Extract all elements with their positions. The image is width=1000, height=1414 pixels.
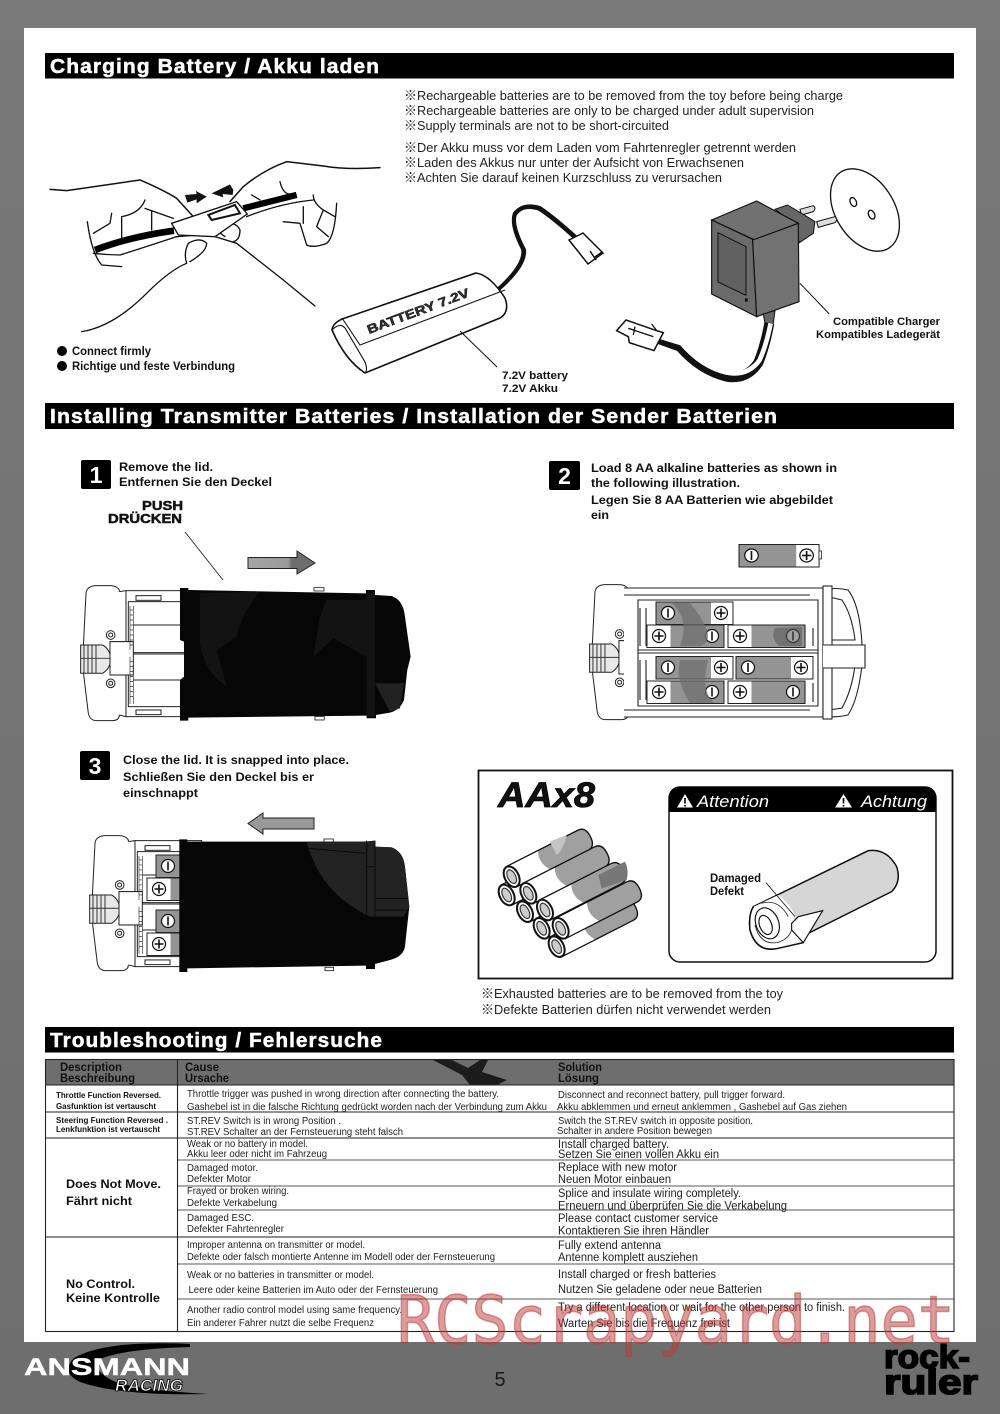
heading: troubleshooting: Troubleshooting / Fehlersuche	[50, 1030, 383, 1052]
push label: DRÜCKEN	[108, 511, 182, 526]
table header: Ursache	[185, 1071, 229, 1085]
column: solution: Nutzen Sie geladene oder neue Batterien	[558, 1284, 762, 1296]
illustration: hands connecting plug	[50, 162, 380, 332]
column: description: Steering Function Reversed .	[56, 1116, 168, 1125]
heading: installing transmitter batteries: Installing Transmitter Batteries / Installation der Sender Batterien	[50, 406, 778, 428]
text block: charging safety notes: ※	[404, 88, 417, 103]
column: solution: Splice and insulate wiring completely.	[558, 1188, 741, 1200]
text block: charging safety notes: Rechargeable batteries are only to be charged under adult supervision	[417, 103, 814, 118]
column: cause: Ein anderer Fahrer nutzt die selbe Frequenz	[187, 1318, 374, 1329]
illustration: eight AA batteries	[495, 826, 644, 960]
step 2 instructions: ein	[591, 508, 609, 522]
warning icon left	[677, 794, 693, 808]
column: solution: Schalter in andere Position bewegen	[557, 1126, 712, 1137]
column: solution	[557, 1090, 847, 1330]
page number: 5	[494, 1369, 506, 1391]
heading: installing transmitter batteries	[45, 403, 954, 429]
text block: connect firmly	[57, 344, 235, 373]
step 1 instructions: Remove the lid.	[119, 460, 213, 474]
panel: AA x8 and attention box	[478, 770, 952, 978]
column: cause: Damaged ESC.	[187, 1213, 254, 1224]
section: installing transmitter batteries	[45, 403, 954, 1017]
troubleshooting table	[45, 1059, 954, 1332]
column: cause: Defekte Verkabelung	[187, 1198, 277, 1209]
text block: charging safety notes: Supply terminals are not to be short-circuited	[417, 118, 669, 133]
table header: Cause	[185, 1060, 219, 1074]
column: solution: Disconnect and reconnect battery, pull trigger forward.	[558, 1090, 785, 1101]
column: description: Does Not Move.	[66, 1177, 161, 1191]
column: solution: Kontaktieren Sie ihren Händler	[558, 1226, 709, 1238]
text block: charging safety notes: ※	[404, 155, 417, 170]
text block: charging safety notes: Laden des Akkus nur unter der Aufsicht von Erwachsenen	[417, 155, 744, 170]
step 2 badge: 2	[558, 463, 571, 489]
column: solution: Install charged battery.	[558, 1139, 669, 1151]
push label	[108, 498, 223, 580]
attention text: Attention	[696, 792, 769, 811]
column: cause: Throttle trigger was pushed in wrong direction after connecting the battery.	[187, 1089, 499, 1100]
text block: exhausted batteries note: Defekte Batterien dürfen nicht verwendet werden	[494, 1002, 771, 1017]
column: cause: Gashebel ist in die falsche Richtung gedrückt worden nach der Verbindung zum Akku	[187, 1102, 547, 1113]
table header: Lösung	[558, 1071, 599, 1085]
step 3 instructions	[123, 753, 349, 800]
column: solution: Replace with new motor	[558, 1162, 677, 1174]
column: cause: ST.REV Switch is in wrong Position .	[187, 1116, 341, 1127]
column: cause: Defekter Fahrtenregler	[187, 1224, 285, 1235]
arrow: slide lid right	[248, 551, 315, 574]
column: solution: Antenne komplett ausziehen	[558, 1252, 698, 1264]
table header: Description	[60, 1060, 122, 1074]
illustration: transmitter with lid on	[81, 586, 411, 721]
column: solution: Warten Sie bis die Frequenz frei ist	[558, 1318, 731, 1330]
step 3 badge: 3	[89, 753, 101, 779]
table header: Solution	[558, 1060, 602, 1074]
column: cause: Damaged motor.	[187, 1163, 258, 1174]
label: battery: 7.2V battery	[502, 370, 569, 382]
illustration: compatible charger	[617, 156, 914, 377]
column: description: Lenkfunktion ist vertauscht	[56, 1125, 160, 1134]
attention header bar	[669, 787, 936, 812]
step 3 instructions: einschnappt	[123, 786, 198, 800]
illustration: 7.2V battery pack	[332, 203, 603, 373]
label: battery: 7.2V Akku	[502, 383, 558, 395]
text block: charging safety notes: Achten Sie darauf keinen Kurzschluss zu verursachen	[417, 170, 722, 185]
table header: Beschreibung	[60, 1071, 135, 1085]
text block: exhausted batteries note: ※	[481, 1002, 494, 1017]
label: battery	[502, 370, 569, 395]
push label: PUSH	[142, 498, 183, 513]
column: cause: Leere oder keine Batterien im Auto oder der Fernsteuerung	[188, 1285, 438, 1296]
footer logo: rock ruler: ruler	[884, 1363, 978, 1402]
step 3 instructions: Schließen Sie den Deckel bis er	[123, 770, 314, 784]
column: solution: Neuen Motor einbauen	[558, 1174, 671, 1186]
step 2 instructions	[591, 461, 837, 522]
column: solution: Install charged or fresh batteries	[558, 1269, 716, 1281]
column: cause: ST.REV Schalter an der Fernsteuerung steht falsch	[187, 1127, 403, 1138]
column: description: Keine Kontrolle	[66, 1291, 160, 1305]
label: compatible charger	[816, 316, 941, 341]
step 2 instructions: Legen Sie 8 AA Batterien wie abgebildet	[591, 493, 833, 507]
icon: loose AA battery	[739, 544, 822, 567]
footer logo: rock ruler	[884, 1338, 978, 1402]
illustration: damaged battery	[750, 850, 898, 949]
step 2 instructions: the following illustration.	[591, 476, 740, 490]
text block: charging safety notes: Der Akku muss vor dem Laden vom Fahrtenregler getrennt werden	[417, 140, 796, 155]
column: solution: Fully extend antenna	[558, 1240, 662, 1252]
table grid	[45, 1059, 954, 1332]
column: cause	[187, 1089, 547, 1329]
column: description	[56, 1091, 168, 1305]
text block: exhausted batteries note	[481, 986, 783, 1017]
text block: charging safety notes: ※	[404, 103, 417, 118]
step 3 instructions: Close the lid. It is snapped into place.	[123, 753, 349, 767]
text block: charging safety notes: Rechargeable batteries are to be removed from the toy before being charge	[417, 88, 843, 103]
text block: charging safety notes	[404, 88, 843, 185]
column: solution: Setzen Sie einen vollen Akku ein	[558, 1149, 719, 1161]
illustration: transmitter closing lid	[90, 836, 409, 972]
text block: exhausted batteries note: ※	[481, 986, 494, 1001]
section: troubleshooting	[45, 1027, 954, 1332]
damaged label: Damaged	[710, 871, 761, 885]
step 2 badge	[549, 461, 580, 490]
text block: charging safety notes: ※	[404, 170, 417, 185]
heading: charging battery: Charging Battery / Akku laden	[50, 56, 380, 78]
column: solution: Erneuern und überprüfen Sie die Verkabelung	[558, 1200, 787, 1212]
label: compatible charger: Compatible Charger	[833, 316, 941, 328]
column: cause: Akku leer oder nicht im Fahrzeug	[187, 1149, 327, 1160]
column: cause: Weak or no battery in model.	[187, 1139, 308, 1150]
step 1 badge: 1	[90, 462, 103, 488]
column: cause: Frayed or broken wiring.	[187, 1186, 289, 1197]
heading: troubleshooting	[45, 1027, 954, 1052]
column: cause: Another radio control model using same frequency.	[187, 1305, 402, 1316]
column: description: Throttle Function Reversed.	[56, 1091, 161, 1100]
achtung text: Achtung	[860, 792, 928, 811]
arrow: slide lid left	[248, 813, 314, 834]
text block: charging safety notes: ※	[404, 140, 417, 155]
text block: connect firmly: Connect firmly	[72, 344, 151, 358]
step 1 badge	[81, 460, 111, 489]
table header	[45, 1059, 954, 1085]
column: solution: Akku abklemmen und erneut anklemmen , Gashebel auf Gas ziehen	[557, 1102, 847, 1113]
column: description: Gasfunktion ist vertauscht	[56, 1102, 156, 1111]
label: compatible charger: Kompatibles Ladegerät	[816, 329, 940, 341]
watermark: RCScrapyard.net: RCScrapyard.net	[397, 1282, 955, 1359]
footer logo: Ansmann Racing: ANSMANN	[24, 1354, 190, 1381]
illustration: 7.2V battery pack: BATTERY 7.2V	[365, 286, 472, 337]
step 1 instructions	[119, 460, 272, 489]
column: solution: Try a different location or wait for the other person to finish.	[558, 1302, 845, 1314]
column: description: No Control.	[66, 1277, 135, 1291]
column: description: Fährt nicht	[66, 1194, 132, 1208]
section: charging battery	[45, 53, 954, 395]
damaged label	[710, 871, 761, 898]
panel: attention	[669, 787, 936, 962]
column: solution: Switch the ST.REV switch in opposite position.	[558, 1116, 753, 1127]
footer logo: Ansmann Racing	[24, 1343, 208, 1395]
column: cause: Weak or no batteries in transmitter or model.	[187, 1270, 374, 1281]
text block: charging safety notes: ※	[404, 118, 417, 133]
AAx8 label: AAx8	[497, 776, 596, 815]
step 2 instructions: Load 8 AA alkaline batteries as shown in	[591, 461, 837, 475]
column: solution: Please contact customer service	[558, 1213, 718, 1225]
damaged label: Defekt	[710, 884, 744, 898]
footer logo: rock ruler: rock-	[884, 1338, 970, 1375]
text block: exhausted batteries note: Exhausted batteries are to be removed from the toy	[494, 986, 783, 1001]
illustration: transmitter with batteries loaded	[590, 585, 865, 720]
column: cause: Defekte oder falsch montierte Antenne im Modell oder der Fernsteuerung	[187, 1252, 495, 1263]
text block: connect firmly: Richtige und feste Verbindung	[72, 359, 235, 373]
heading: charging battery	[45, 53, 954, 78]
warning icon right	[835, 794, 852, 808]
column: cause: Improper antenna on transmitter or model.	[187, 1240, 365, 1251]
column: cause: Defekter Motor	[187, 1174, 252, 1185]
step 3 badge	[80, 751, 110, 780]
footer logo: Ansmann Racing: RACING	[115, 1376, 183, 1395]
step 1 instructions: Entfernen Sie den Deckel	[119, 475, 272, 489]
